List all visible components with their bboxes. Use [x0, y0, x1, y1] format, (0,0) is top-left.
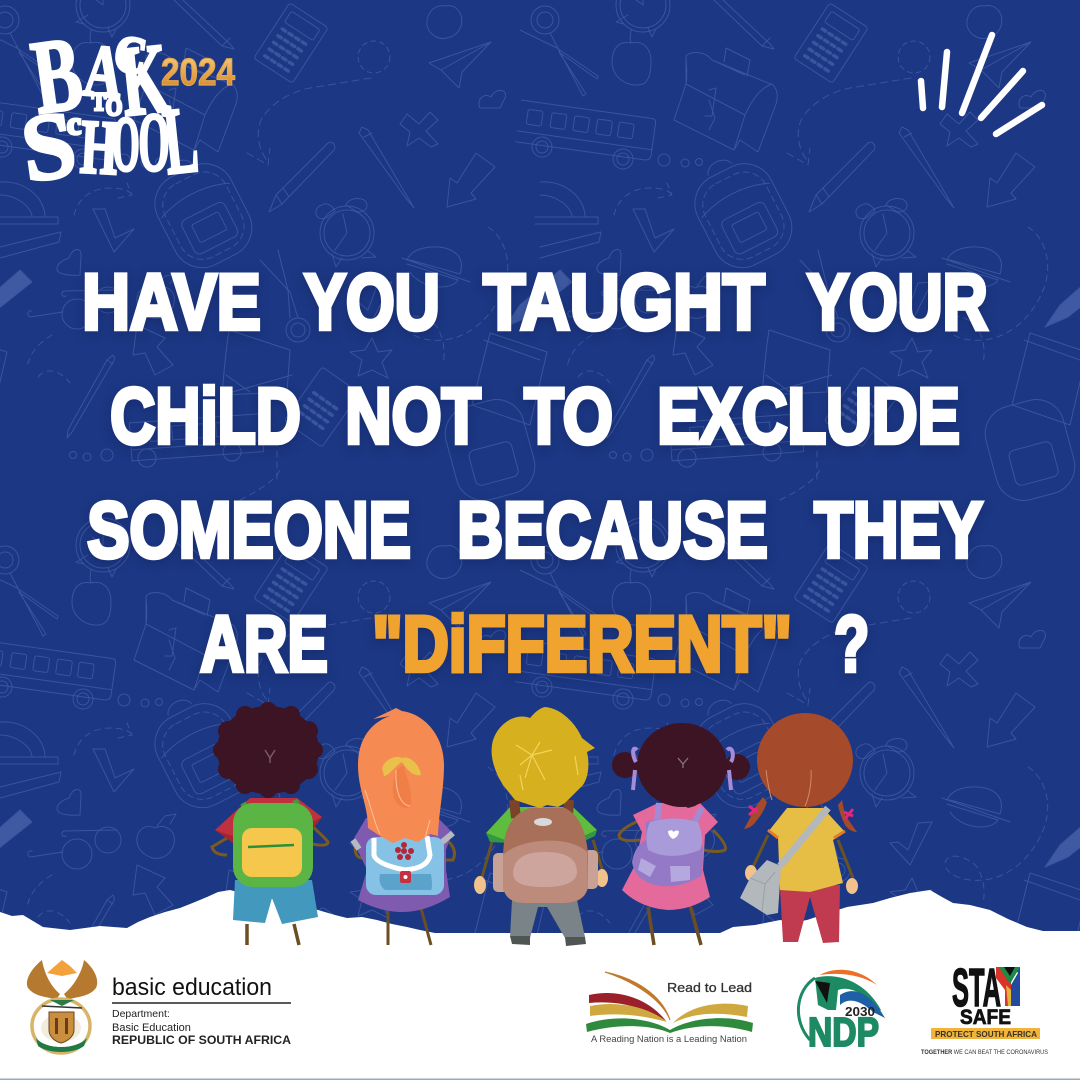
heading: CHiLD — [110, 371, 301, 460]
heading: "DiFFERENT" — [372, 599, 792, 688]
child 2: orange hair with blue backpack — [353, 708, 455, 945]
logo: Back to School 2024: A — [81, 29, 125, 114]
child 3: blond hair with brown backpack — [474, 707, 608, 946]
logo: Stay Safe: PROTECT SOUTH AFRICA — [935, 1029, 1037, 1039]
logo: Back to School 2024: c — [67, 105, 81, 141]
heading: ARE — [200, 599, 328, 688]
logo: Stay Safe: STA — [952, 958, 1001, 1018]
logo: NDP 2030: 2030 — [845, 1004, 875, 1019]
heading: EXCLUDE — [657, 371, 960, 460]
child 5: auburn hair with yellow shirt and grey bag — [740, 713, 858, 943]
logo: NDP 2030 — [798, 970, 885, 1055]
logo: Back to School 2024: K — [116, 23, 173, 137]
logo: Stay Safe: SAFE — [960, 1006, 1011, 1029]
heading: HAVE — [82, 257, 261, 346]
logo: Back to School 2024: O — [106, 93, 122, 121]
heading: NOT — [345, 371, 481, 460]
flag Y — [996, 967, 1020, 1006]
heading: YOU — [304, 257, 440, 346]
child 4: pigtails with purple backpack — [612, 723, 750, 945]
coat of arms — [27, 960, 97, 1053]
logo: Back to School 2024: O — [138, 96, 170, 189]
logo: Back to School 2024: B — [26, 15, 89, 136]
heading: ? — [834, 599, 869, 688]
heading — [82, 257, 988, 688]
logo: Back to School 2024: O — [112, 102, 140, 188]
heading: TO — [524, 371, 613, 460]
logo: NDP 2030: NDP — [808, 1009, 879, 1055]
flower — [395, 842, 414, 860]
logo: Department of Basic Education: REPUBLIC OF SOUTH AFRICA — [112, 1035, 291, 1047]
heading: BECAUSE — [457, 485, 768, 574]
heading: THEY — [814, 485, 983, 574]
logo: Back to School 2024: C — [111, 25, 150, 86]
torn white paper footer — [0, 890, 1080, 1080]
logo: Back to School 2024: H — [79, 104, 120, 191]
child 1: curly hair with green backpack — [212, 702, 328, 945]
heading: SOMEONE — [87, 485, 411, 574]
logo: Read to Lead: A Reading Nation is a Leading Nation — [591, 1034, 747, 1045]
logo: Department of Basic Education — [27, 960, 291, 1053]
logo: Stay Safe: TOGETHER WE CAN BEAT THE CORONAVIRUS — [921, 1049, 1049, 1056]
heading: YOUR — [807, 257, 988, 346]
logo: Department of Basic Education: Department: — [112, 1008, 170, 1020]
logo: Back to School 2024 — [15, 15, 235, 202]
logo: Department of Basic Education: Basic Education — [112, 1022, 191, 1034]
wordmark: basic education — [112, 974, 272, 1001]
2024 in gold: 2024 — [161, 52, 235, 94]
logo: Stay Safe — [921, 958, 1049, 1056]
logo: Read to Lead — [586, 972, 753, 1045]
sparkle rays icon — [921, 35, 1042, 134]
logo: Back to School 2024: T — [92, 88, 107, 116]
heading: TAUGHT — [483, 257, 765, 346]
logo: Read to Lead: Read to Lead — [667, 981, 752, 995]
logo: Back to School 2024: S — [15, 90, 82, 202]
logo: Back to School 2024: L — [159, 88, 203, 195]
